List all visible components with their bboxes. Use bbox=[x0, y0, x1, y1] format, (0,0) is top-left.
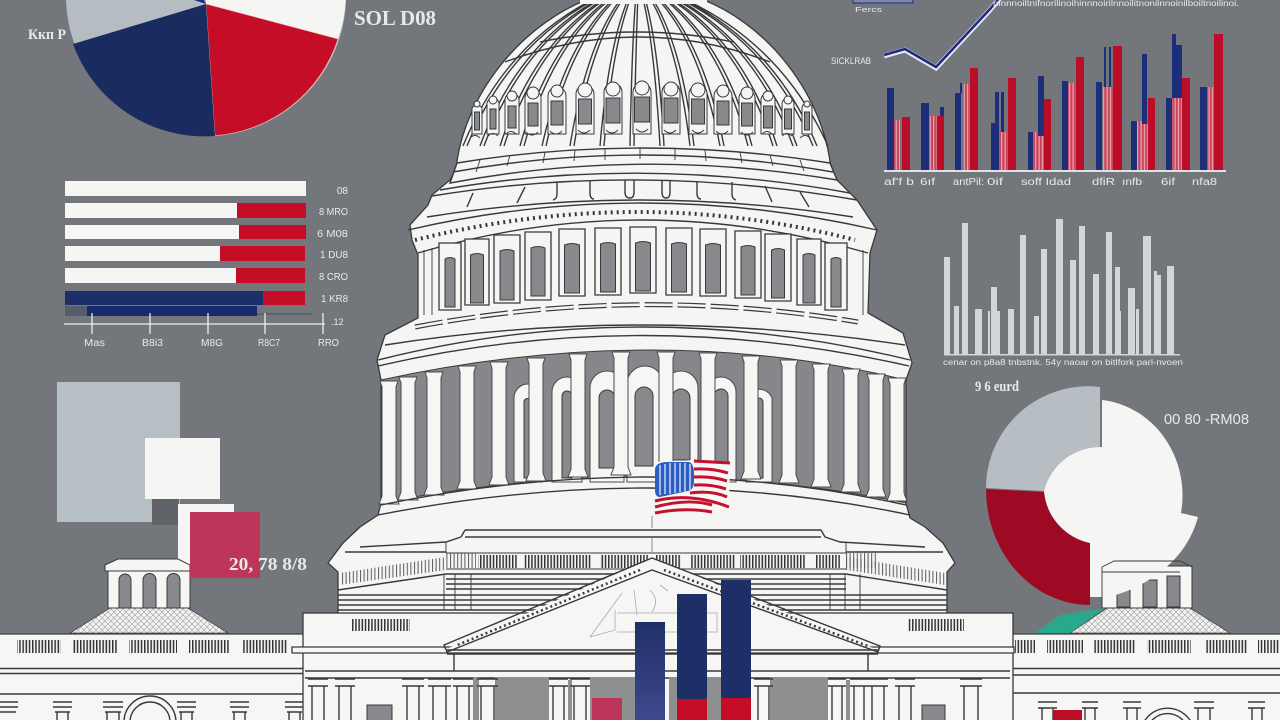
dome base rings bbox=[450, 148, 837, 183]
right wing of building bbox=[1005, 634, 1280, 720]
horizontal bar chart: 6 M08 bbox=[317, 229, 348, 240]
pie label left: Ккп P bbox=[28, 27, 66, 43]
capitol building: rotunda and dome bbox=[328, 0, 955, 615]
horizontal bar chart bbox=[64, 181, 348, 349]
crimson square bbox=[190, 512, 260, 578]
tympanum sketch bbox=[590, 585, 717, 637]
horizontal bar chart: R8C7 bbox=[258, 338, 280, 349]
left cupola bbox=[70, 559, 228, 633]
grouped bar chart: navy and red: af'f b bbox=[884, 177, 915, 188]
grouped bar chart: navy and red: antPil: bbox=[953, 177, 984, 188]
grouped bar chart: navy and red: 0if bbox=[987, 177, 1003, 188]
colonnade backing bbox=[381, 350, 906, 503]
colonnade columns bbox=[379, 352, 907, 504]
horizontal bar chart: 1 DU8 bbox=[320, 250, 348, 261]
line chart: Fercs bbox=[855, 7, 883, 14]
platform and balustrade bbox=[340, 530, 945, 585]
pale grey bar chart: cenar on p8a8 tnbstnk. 54y naoar on bitlfork parl-nvoen bbox=[943, 357, 1183, 367]
grouped bar chart: navy and red: ınfb bbox=[1122, 177, 1143, 188]
grouped bar chart: navy and red: 6if bbox=[1161, 177, 1175, 188]
pediment bbox=[444, 558, 880, 654]
central bars: navy and red bbox=[592, 580, 751, 720]
horizontal bar chart: .12 bbox=[331, 317, 344, 327]
teal roof fragment bbox=[1035, 608, 1105, 633]
pie chart: top left bbox=[66, 0, 346, 136]
stepped base lines bbox=[338, 574, 947, 610]
crimson square label: 20, 78 8/8 bbox=[229, 554, 307, 574]
horizontal bar chart: RRO bbox=[318, 338, 339, 349]
horizontal bar chart: 8 MRO bbox=[319, 207, 348, 218]
dome windows bbox=[470, 81, 812, 138]
donut label right: 00 80 -RM08 bbox=[1164, 411, 1249, 428]
left wing of building bbox=[0, 634, 308, 720]
grouped bar chart: navy and red: dfiR bbox=[1092, 177, 1115, 188]
right cupola bbox=[1070, 566, 1230, 633]
grouped bar chart: navy and red: soff Idad bbox=[1021, 177, 1071, 188]
line chart bbox=[831, 0, 1239, 68]
american flag bbox=[655, 460, 730, 515]
donut label left: 9 6 eurd bbox=[975, 379, 1020, 395]
dash row below panels bbox=[415, 305, 858, 327]
pale grey bar chart bbox=[943, 219, 1183, 367]
horizontal bar chart: 1 KR8 bbox=[321, 294, 348, 305]
portico columns bbox=[308, 679, 982, 720]
grouped bar chart: navy and red: 6ıf bbox=[920, 177, 935, 188]
scroll brackets bbox=[467, 180, 809, 207]
flagpole bbox=[651, 516, 653, 552]
dentil band bbox=[415, 212, 855, 240]
donut chart bbox=[986, 386, 1198, 605]
drum window panels bbox=[424, 227, 863, 315]
portico gaps bbox=[367, 677, 945, 720]
stair blocks bbox=[444, 574, 860, 610]
line chart: SICKLRAB bbox=[831, 56, 871, 66]
dome lantern base bbox=[580, 0, 707, 4]
inner arches and windows bbox=[514, 366, 772, 482]
dome upper ring bbox=[505, 32, 770, 62]
drum ledge arcs bbox=[378, 325, 910, 366]
dome ribs bbox=[463, 0, 828, 146]
overlapping squares bbox=[57, 382, 234, 574]
horizontal bar chart: B8i3 bbox=[142, 338, 163, 349]
grouped bar chart: navy and red bbox=[884, 34, 1226, 188]
grouped bar chart: navy and red: nfa8 bbox=[1192, 177, 1218, 188]
silhouette bbox=[328, 0, 955, 615]
central portico bbox=[292, 613, 1014, 720]
horizontal bar chart: Mas bbox=[84, 338, 105, 349]
colonnade base arcs bbox=[378, 477, 910, 515]
horizontal bar chart: M8G bbox=[201, 338, 223, 349]
horizontal bar chart: 08 bbox=[337, 186, 348, 197]
pie label right: SOL D08 bbox=[354, 6, 436, 30]
red square: right wing bbox=[1053, 710, 1082, 720]
horizontal bar chart: 8 CRO bbox=[319, 272, 348, 283]
